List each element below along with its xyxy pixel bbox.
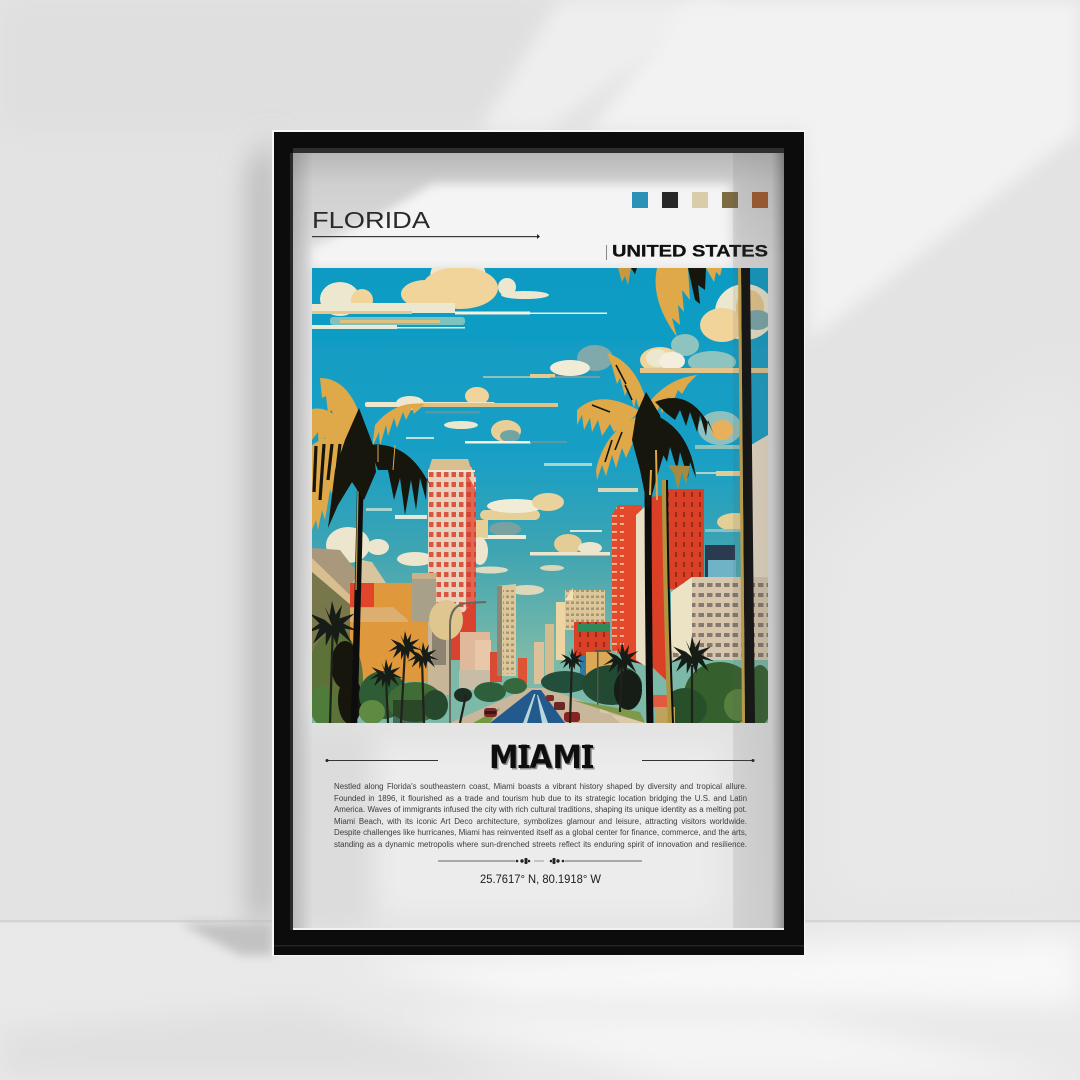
small palms <box>306 601 714 723</box>
upper right clouds <box>715 284 768 340</box>
coordinates: 25.7617° N, 80.1918° W <box>480 872 602 886</box>
beige hotel building <box>671 577 768 660</box>
poster paper highlights <box>310 180 734 906</box>
description paragraph: America. Waves of immigrants infused the city with rich cultural traditions, shaping its unique identity as a melting pot. <box>334 805 747 814</box>
far left buildings <box>312 548 386 660</box>
description paragraph: Miami Beach, with its iconic Art Deco architecture, symbolizes glamour and leisure, attracting visitors worldwide. <box>334 816 747 826</box>
heading: Florida with arrow: FLORIDA <box>312 207 430 233</box>
description paragraph: Nestled along Florida's southeastern coast, Miami boasts a vibrant history shaped by diversity and tropical allure. <box>334 782 747 791</box>
description paragraph: Founded in 1896, it flourished as a trade and tourism hub due to its strategic location bridging the U.S. and Latin <box>334 794 747 802</box>
centre distant buildings <box>429 584 611 690</box>
description paragraph: Despite challenges like hurricanes, Miami has reinvented itself as a global center for finance, commerce, and the arts, <box>334 828 747 837</box>
right foreground greenery <box>653 662 768 723</box>
title: Miami: MIAMI <box>490 740 594 778</box>
left foreground greenery <box>307 632 448 728</box>
road <box>450 688 645 723</box>
clouds <box>312 250 775 595</box>
description paragraph: standing as a dynamic metropolis where sun-drenched streets reflect its enduring spirit of innovation and resilience. <box>334 840 747 848</box>
title: Miami: MIAMI <box>489 738 593 776</box>
centre palm tree <box>577 353 716 723</box>
illustration: Miami street with palms and skyline <box>312 268 768 723</box>
sky <box>312 268 768 723</box>
lower clouds <box>326 527 370 563</box>
red tower <box>428 459 476 660</box>
heading: United States: UNITED STATES <box>612 242 768 260</box>
orange building <box>350 573 450 695</box>
description paragraph <box>334 782 747 848</box>
street lamp <box>450 602 486 723</box>
tall right palm and top fronds <box>618 268 755 723</box>
street trees <box>454 650 650 723</box>
left palm tree <box>312 378 432 723</box>
frame shadow on wall <box>250 135 273 922</box>
mid sky clouds <box>483 376 530 378</box>
right red buildings <box>612 435 768 680</box>
